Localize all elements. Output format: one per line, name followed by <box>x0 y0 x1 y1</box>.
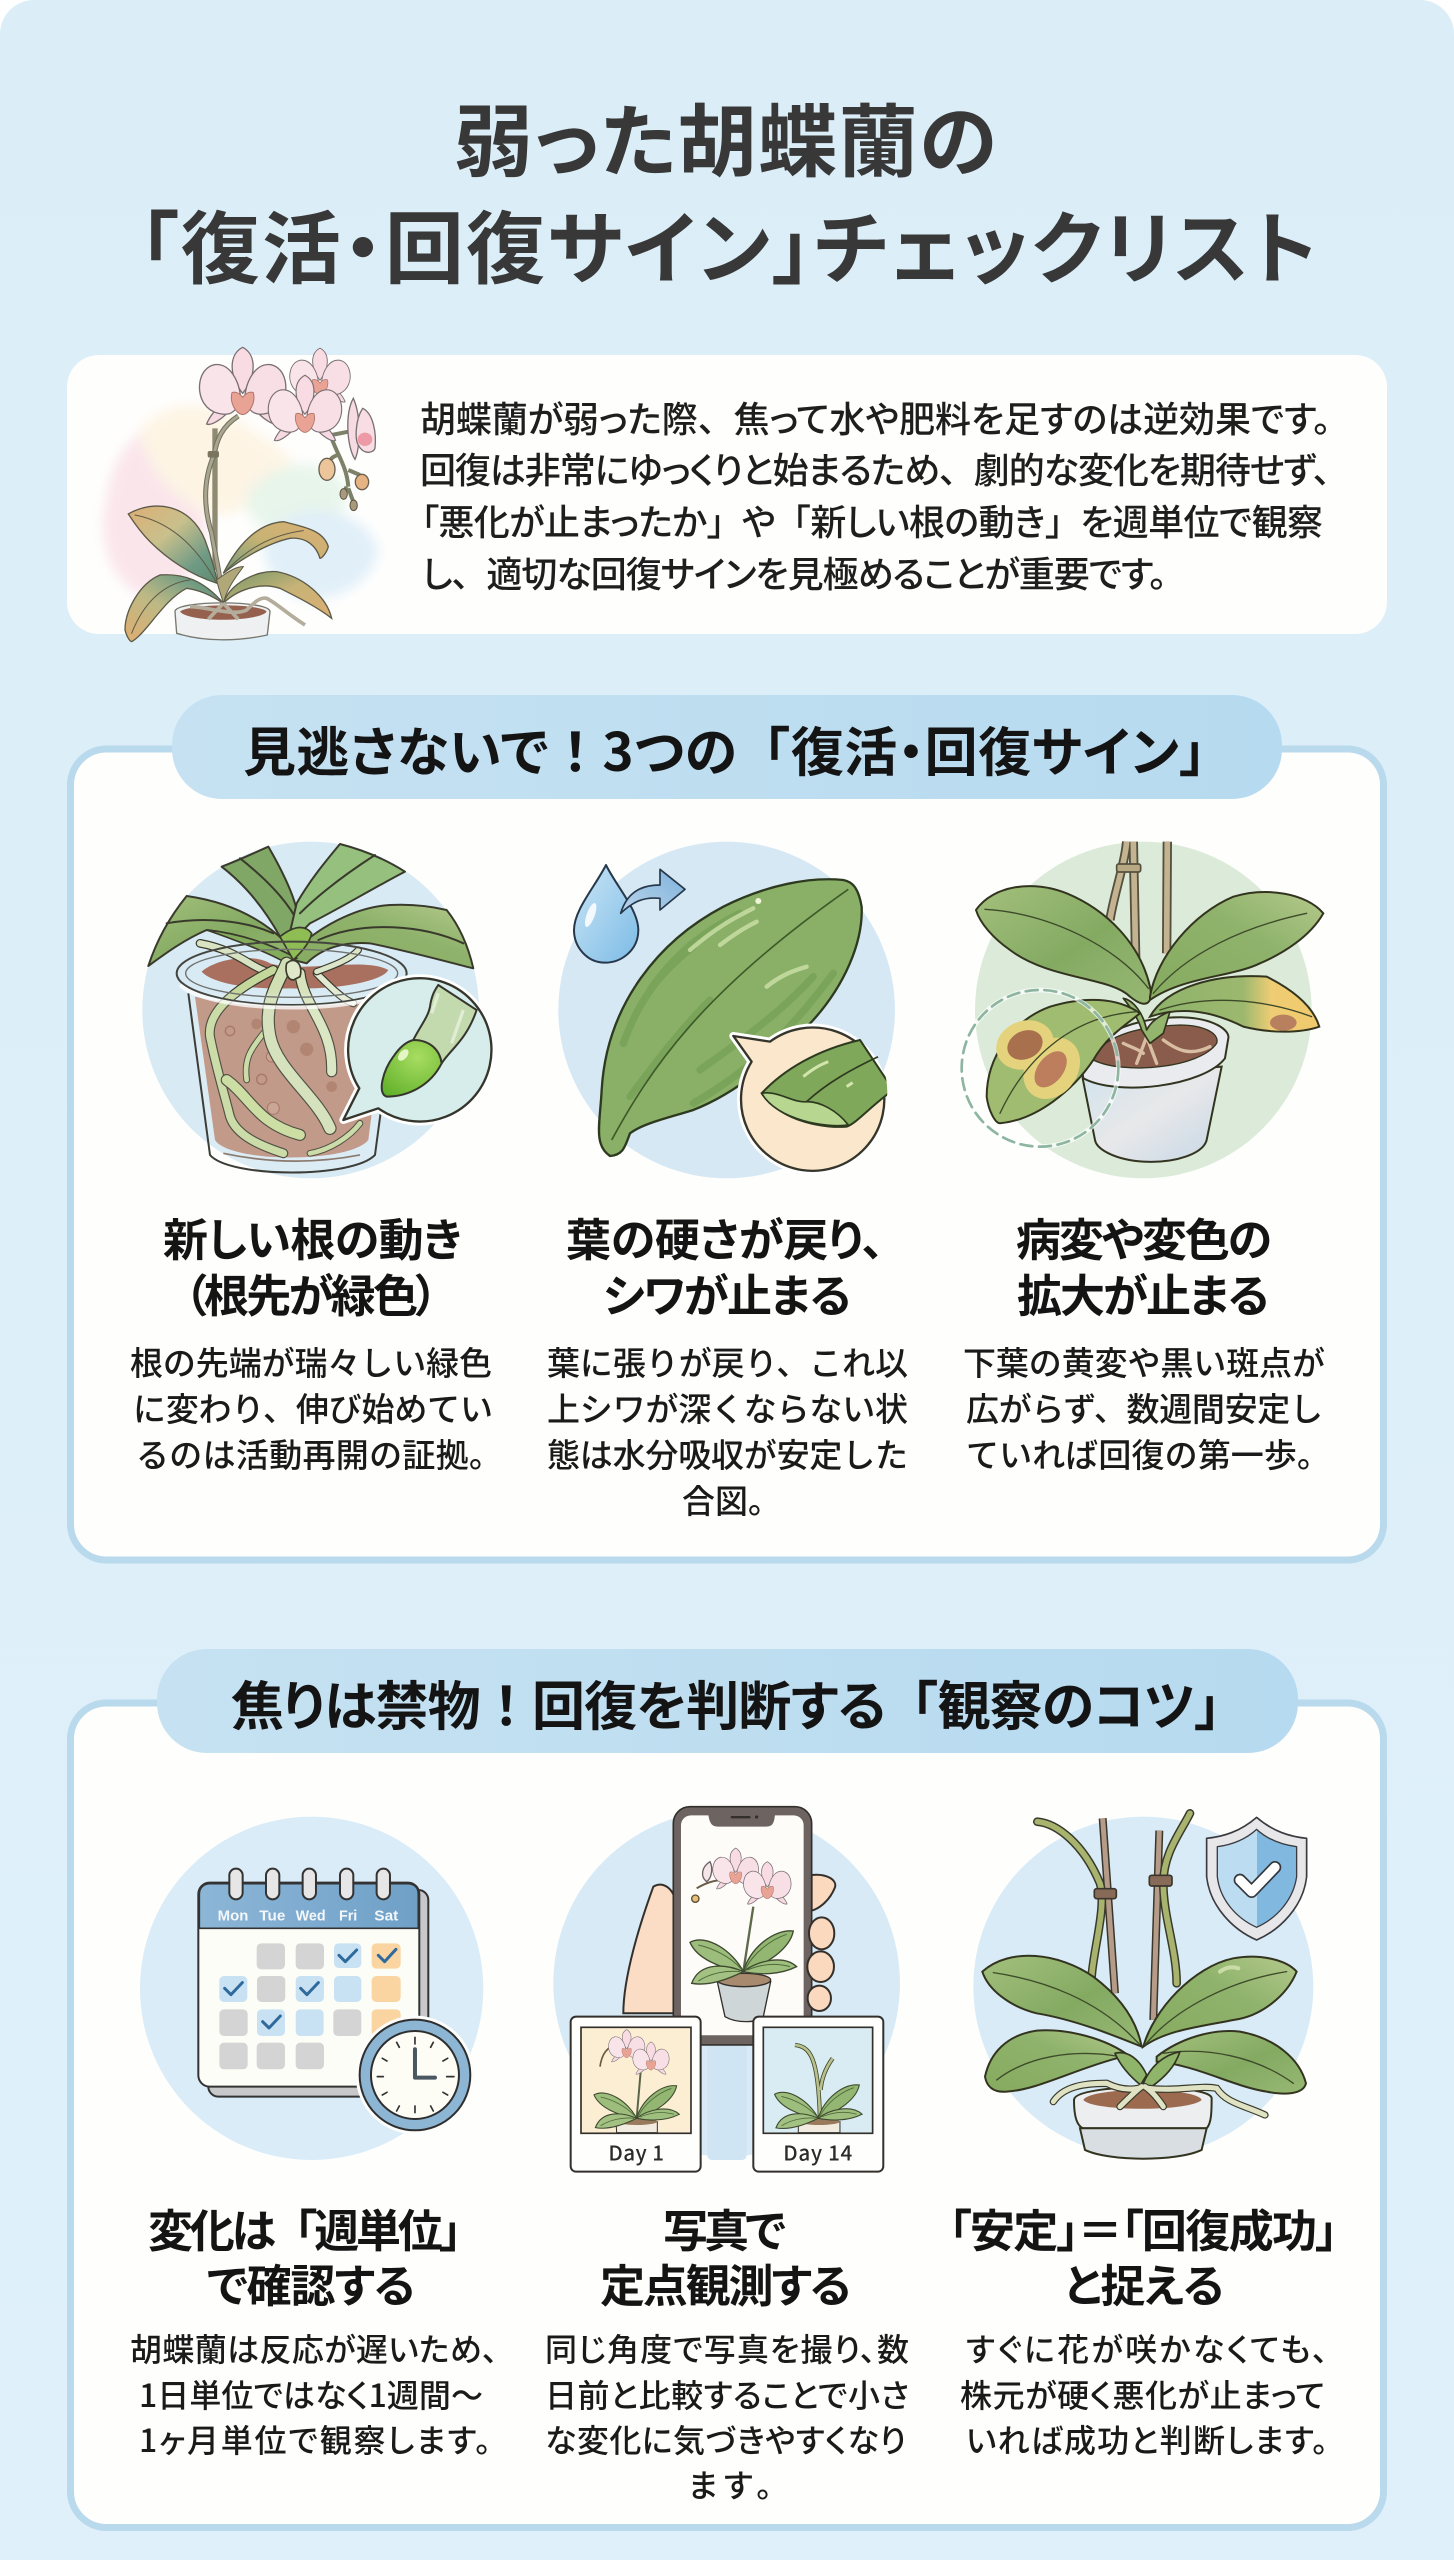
panel frame <box>70 1703 1384 2528</box>
icon: stable orchid with shield <box>973 1813 1313 2159</box>
tip 3 text: いれば成功と判断します。 <box>966 2416 1328 2462</box>
title: 弱った胡蝶蘭の <box>454 78 997 193</box>
tip 1 text: で確認する <box>207 2250 415 2315</box>
sign 2 text: 合図。 <box>682 1475 781 1523</box>
sign 1 text: 根の先端が瑞々しい緑色 <box>130 1337 492 1385</box>
callout: green root tip magnified <box>343 978 491 1122</box>
tip 3 text: 「安定」＝「回復成功」 <box>949 2195 1338 2260</box>
title <box>139 78 1317 300</box>
sign 1 text: に変わり、伸び始めてい <box>133 1383 493 1431</box>
icon: orchid with lesions that stopped spreading <box>962 842 1323 1178</box>
tip 2 text: 定点観測する <box>600 2250 851 2315</box>
sign 2 text: 葉の硬さが戻り、 <box>566 1204 884 1269</box>
sign 3 text <box>963 1204 1330 1477</box>
title: 「復活・回復サイン」チェックリスト <box>139 185 1317 300</box>
tip 2 text: 写真で <box>663 2195 786 2260</box>
intro text: 胡蝶蘭が弱った際、焦って水や肥料を足すのは逆効果です。 <box>420 391 1331 443</box>
sign 1 text: （根先が緑色） <box>184 1260 438 1325</box>
callout: leaf cross section <box>733 1028 893 1171</box>
intro text: 回復は非常にゆっくりと始まるため、劇的な変化を期待せず、 <box>420 442 1331 494</box>
polaroid: Day 1 <box>571 2017 701 2172</box>
icon: calendar and clock: Mon <box>218 1907 248 1924</box>
sign 2 text: 上シワが深くならない状 <box>547 1383 908 1431</box>
tip 2 text <box>545 2195 909 2507</box>
tip 1 text: 1ヶ月単位で観察します。 <box>139 2416 491 2462</box>
sign 2 text: シワが止まる <box>603 1260 851 1325</box>
icon: shield with check <box>1207 1817 1307 1940</box>
icon: phone photo comparison Day 1 and Day 14 <box>553 1807 900 2172</box>
intro text <box>420 391 1331 598</box>
icon: firm leaf with water drop <box>558 842 895 1178</box>
sign 1 text: るのは活動再開の証拠。 <box>136 1429 502 1477</box>
intro card background <box>67 355 1387 634</box>
tip 1 text: 胡蝶蘭は反応が遅いため、 <box>130 2325 498 2371</box>
heading pill <box>157 1649 1298 1753</box>
tip 3 text: と捉える <box>1064 2250 1224 2315</box>
icon: new green root tip in clear pot <box>142 842 491 1178</box>
sign 2 text: 態は水分吸収が安定した <box>547 1429 908 1477</box>
tip 2 text: ます。 <box>688 2461 772 2507</box>
icon: calendar and clock: Wed <box>296 1907 326 1924</box>
tip 2 text: 日前と比較することで小さ <box>545 2371 909 2417</box>
panel: observation tips <box>70 1649 1384 2528</box>
sign 3 text: 病変や変色の <box>1016 1204 1272 1269</box>
sign 3 text: ていれば回復の第一歩。 <box>966 1429 1330 1477</box>
intro text: し、適切な回復サインを見極めることが重要です。 <box>422 546 1167 598</box>
sign 3 text: 下葉の黄変や黒い斑点が <box>963 1337 1325 1385</box>
heading pill: 焦りは禁物！回復を判断する「観察のコツ」 <box>231 1665 1221 1741</box>
panel: intro <box>67 347 1387 642</box>
sign 1 text <box>130 1204 502 1477</box>
tip 1 text <box>130 2195 498 2462</box>
tip 3 text <box>949 2195 1338 2462</box>
sign 3 text: 広がらず、数週間安定し <box>966 1383 1323 1431</box>
sign 3 text: 拡大が止まる <box>1017 1260 1269 1325</box>
heading pill <box>172 695 1282 799</box>
sign 2 text: 葉に張りが戻り、これ以 <box>547 1337 908 1385</box>
panel frame <box>70 749 1384 1560</box>
icon: calendar and clock <box>140 1817 483 2160</box>
polaroid: Day 14 <box>753 2017 883 2172</box>
tip 3 text: 株元が硬く悪化が止まって <box>960 2371 1325 2417</box>
tip 1 text: 変化は「週単位」 <box>148 2195 462 2260</box>
icon: calendar and clock: Tue <box>259 1907 285 1924</box>
icon: calendar and clock: Sat <box>374 1907 398 1924</box>
panel: 3 recovery signs <box>70 695 1384 1560</box>
sign 2 text <box>547 1204 908 1523</box>
tip 3 text: すぐに花が咲かなくても、 <box>966 2325 1328 2371</box>
polaroid: Day 14: Day 14 <box>783 2137 853 2167</box>
icon: calendar and clock: Fri <box>339 1907 357 1924</box>
tip 2 text: 同じ角度で写真を撮り、数 <box>545 2325 909 2371</box>
intro text: 「悪化が止まったか」や「新しい根の動き」を週単位で観察 <box>421 494 1323 546</box>
tip 2 text: な変化に気づきやすくなり <box>545 2416 906 2462</box>
polaroid: Day 1: Day 1 <box>608 2137 664 2167</box>
pot <box>1083 1017 1228 1162</box>
heading pill: 見逃さないで！3つの「復活・回復サイン」 <box>243 711 1206 787</box>
icon: weakened orchid with watercolor wash <box>103 347 378 642</box>
tip 1 text: 1日単位ではなく1週間〜 <box>139 2371 483 2417</box>
sign 1 text: 新しい根の動き <box>163 1204 462 1269</box>
